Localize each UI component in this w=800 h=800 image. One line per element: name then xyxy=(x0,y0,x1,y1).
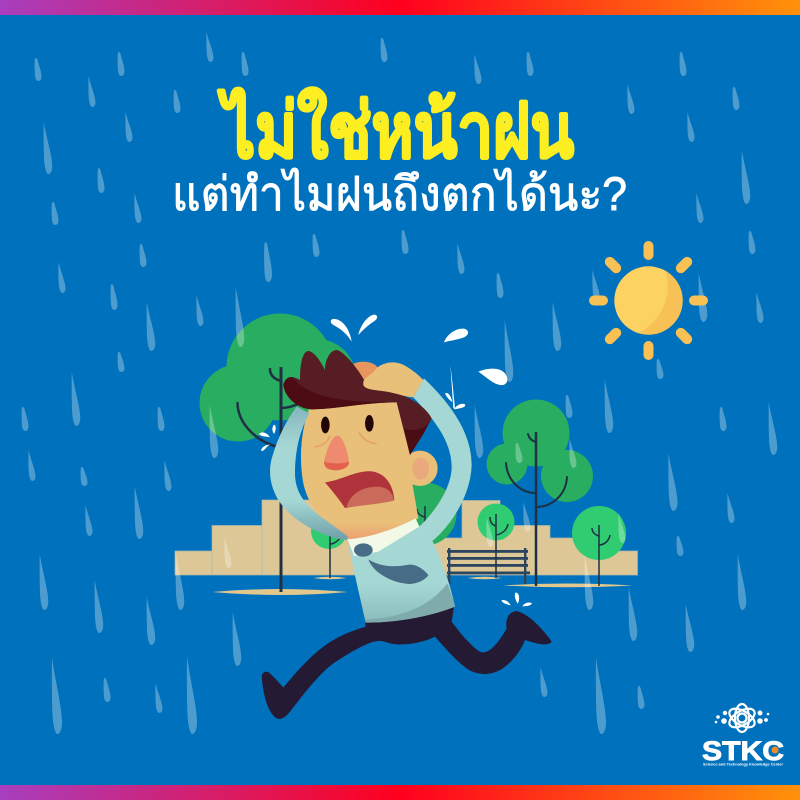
logo atom emblem xyxy=(726,704,758,732)
right arm sleeve xyxy=(413,378,472,542)
logo dots xyxy=(715,710,769,724)
small tree behind man, left xyxy=(311,513,347,578)
hand on head xyxy=(363,362,423,397)
small tree right xyxy=(572,506,626,586)
eyes xyxy=(321,415,374,433)
under-eye wrinkles xyxy=(315,433,376,447)
ear xyxy=(402,451,438,486)
face xyxy=(301,400,418,539)
open mouth xyxy=(325,471,394,508)
STKC logo xyxy=(702,704,784,766)
large right tree xyxy=(486,400,593,586)
running man character xyxy=(259,315,552,719)
bottom gradient bar xyxy=(0,785,800,800)
icon: sun xyxy=(589,241,708,360)
logo wordmark: STKC xyxy=(702,736,784,766)
small tree by bench xyxy=(478,504,514,578)
left arm sleeve xyxy=(270,407,348,540)
logo tagline: Science and Technology Knowledge Center xyxy=(703,762,784,766)
nose xyxy=(324,436,349,470)
logo orange dot xyxy=(772,746,778,754)
big left tree xyxy=(200,314,356,592)
sweat splashes xyxy=(259,315,532,606)
bald scalp xyxy=(347,362,379,382)
ground shadows xyxy=(212,577,633,595)
trousers and shoes xyxy=(262,607,552,719)
tie knot xyxy=(354,543,373,557)
top gradient bar xyxy=(0,0,800,15)
hair xyxy=(283,350,432,455)
shirt lower shadow xyxy=(365,583,455,623)
title heading: ไม่ใช่หน้าฝน xyxy=(217,87,574,174)
skyline buildings xyxy=(175,500,638,575)
park bench xyxy=(447,548,530,584)
tree behind man, right xyxy=(394,482,456,546)
necktie xyxy=(368,559,428,584)
shirt collar xyxy=(348,518,419,556)
shirt body xyxy=(348,523,455,623)
park scenery xyxy=(175,314,638,595)
subtitle heading: แต่ทำไมฝนถึงตกได้นะ? xyxy=(172,167,627,220)
